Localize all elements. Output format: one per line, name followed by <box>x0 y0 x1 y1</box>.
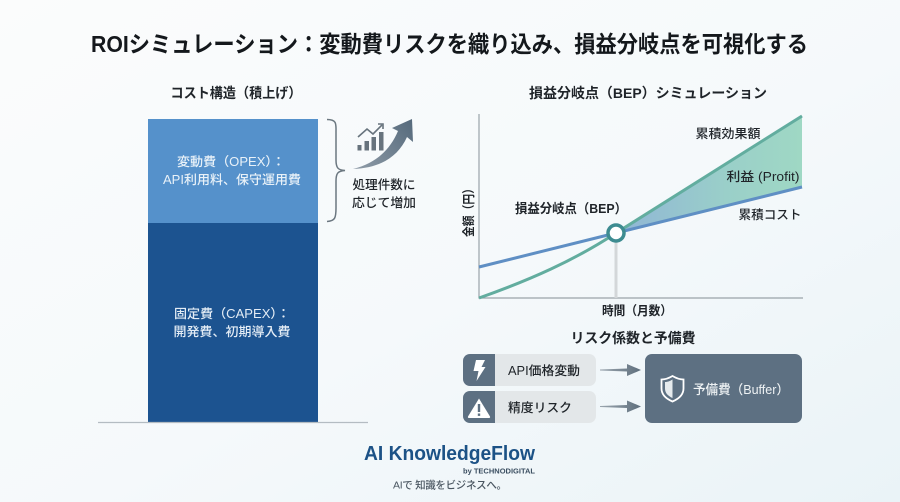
risk item: accuracy risk <box>463 391 596 423</box>
x axis label: 時間（月数） <box>602 303 672 318</box>
risk item: API price fluctuation: API価格変動 <box>508 363 580 378</box>
label: break-even point: 損益分岐点（BEP） <box>515 201 627 216</box>
note: scales with processing volume: 処理件数に <box>352 177 416 192</box>
title: ROIシミュレーション：変動費リスクを織り込み、損益分岐点を可視化する <box>91 31 808 57</box>
buffer box <box>645 354 802 423</box>
bracket <box>327 120 345 222</box>
bar segment: variable cost OPEX: API利用料、保守運用費 <box>163 172 301 187</box>
line: cumulative benefit <box>479 116 802 298</box>
bar segment: fixed cost CAPEX <box>148 223 318 422</box>
logo <box>364 443 535 492</box>
logo byline: by TECHNODIGITAL <box>463 466 535 476</box>
bar segment: variable cost OPEX <box>148 119 318 223</box>
BEP drop line <box>614 242 618 298</box>
chart axes <box>479 114 803 298</box>
line: cumulative cost <box>479 187 802 267</box>
bar segment: fixed cost CAPEX: 固定費（CAPEX）： <box>174 306 290 321</box>
label: cumulative benefit: 累積効果額 <box>696 126 761 141</box>
buffer box: 予備費（Buffer） <box>693 382 789 397</box>
logo wordmark: AI KnowledgeFlow <box>364 443 535 465</box>
heading: risk factors and buffer: リスク係数と予備費 <box>570 330 696 346</box>
note: scales with processing volume <box>352 177 416 210</box>
heading: break-even simulation: 損益分岐点（BEP）シミュレーション <box>529 85 767 101</box>
icon: growth chart with arrow <box>353 119 413 169</box>
icon: lightning <box>474 360 486 381</box>
risk item: API price fluctuation <box>463 354 596 386</box>
label: profit: 利益 (Profit) <box>726 170 800 184</box>
heading: cost structure: コスト構造（積上げ） <box>170 85 302 101</box>
BEP marker <box>608 225 624 241</box>
arrow: API risk to buffer <box>600 364 641 376</box>
icon: shield <box>662 376 684 402</box>
break-even chart <box>461 114 803 318</box>
note: scales with processing volume: 応じて増加 <box>352 195 416 210</box>
tagline: AIで 知識をビジネスへ。 <box>393 478 507 492</box>
risk item: accuracy risk: 精度リスク <box>508 400 572 415</box>
bar segment: fixed cost CAPEX: 開発費、初期導入費 <box>174 324 290 339</box>
y axis label: 金額（円） <box>461 183 476 237</box>
stacked cost bar <box>148 119 318 422</box>
profit area <box>616 116 802 233</box>
bar segment: variable cost OPEX: 変動費（OPEX）： <box>177 154 285 169</box>
icon: warning triangle <box>468 398 490 418</box>
label: cumulative cost: 累積コスト <box>738 207 802 222</box>
arrow: accuracy risk to buffer <box>600 400 641 412</box>
